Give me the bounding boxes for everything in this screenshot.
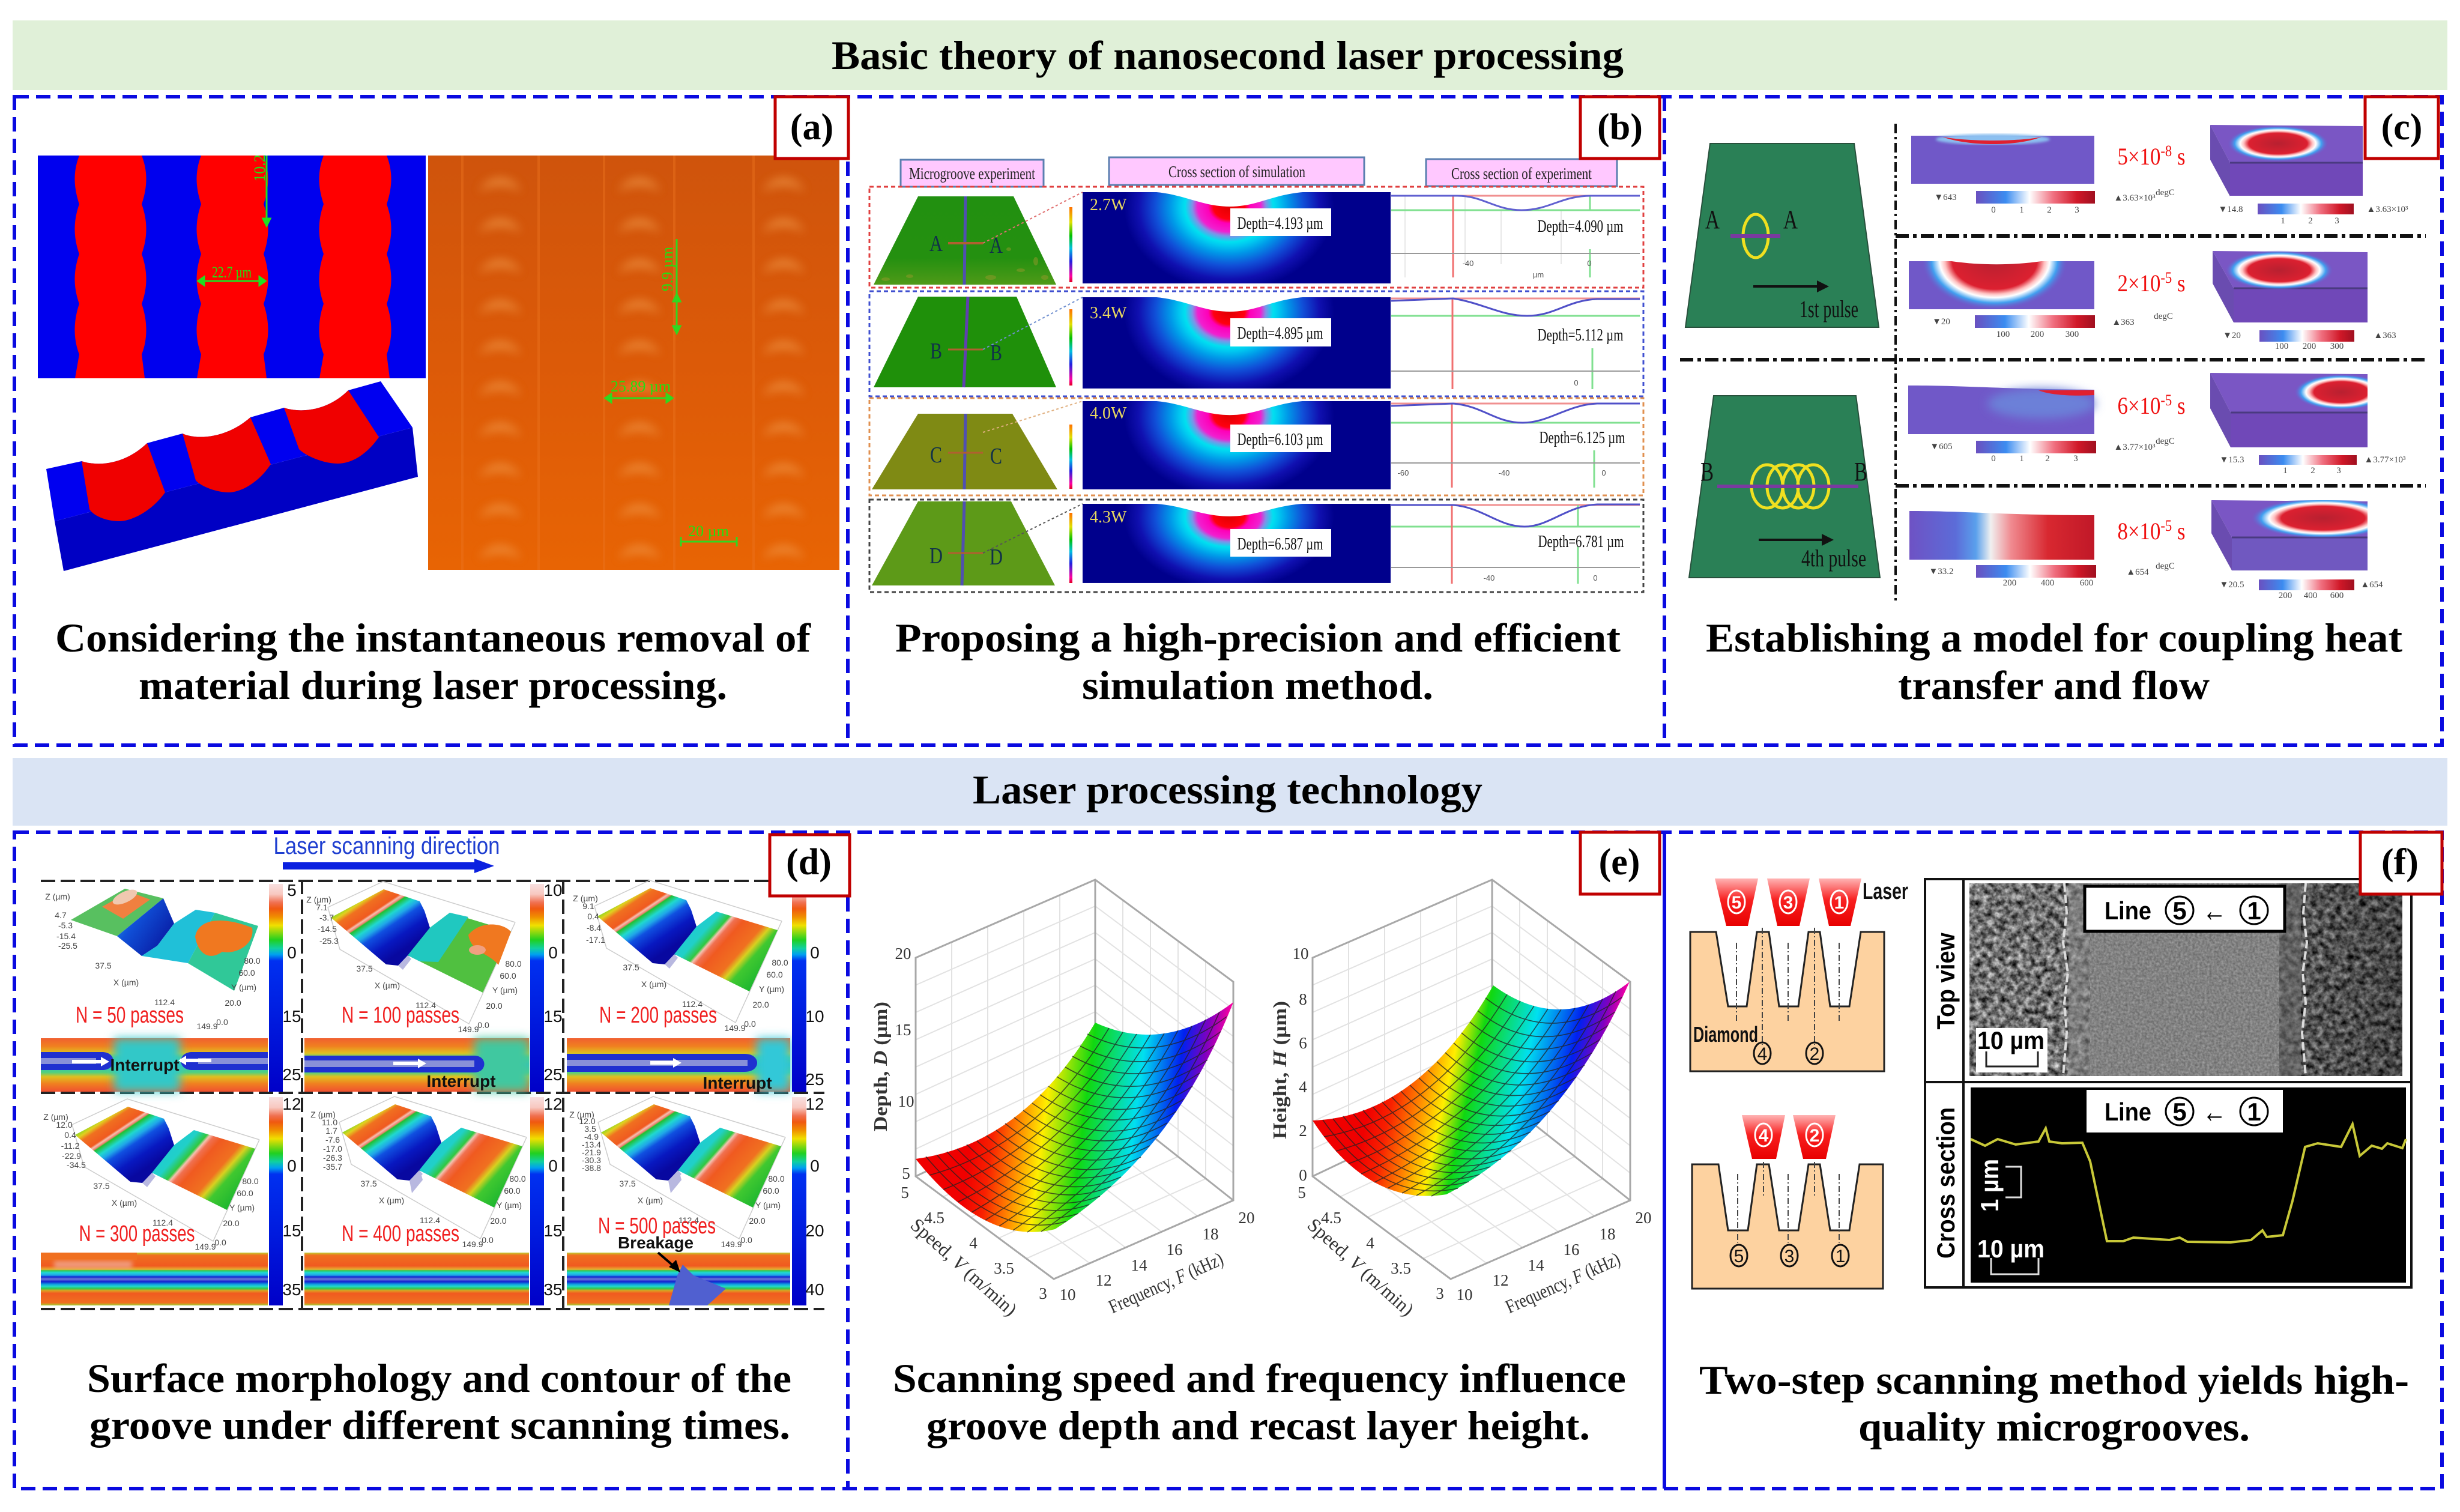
- cross-section profile: Line: [2105, 1098, 2151, 1126]
- surface plot: depth: 3: [1039, 1284, 1047, 1302]
- surface plot: depth: [869, 880, 1255, 1320]
- surface plot: depth: 4.5: [924, 1209, 944, 1227]
- row 4.3W: D: [929, 543, 943, 569]
- cell: N = 300 passes: 0: [287, 1157, 297, 1175]
- surface plot: height: Height, H (µm): [1269, 1001, 1290, 1139]
- 4th pulse schematic: [1689, 396, 1880, 578]
- cell: N = 50 passes: 25: [282, 1065, 301, 1084]
- label (f): [2360, 832, 2442, 894]
- 5e-8 s row: ▼643: [1934, 193, 1957, 202]
- 8e-5 s row: 8×10: [2117, 518, 2167, 545]
- surface plot: depth: 12: [1095, 1271, 1112, 1289]
- 5e-8 s row: 3: [2335, 216, 2339, 226]
- 2e-5 s row: 100: [1996, 330, 2010, 339]
- label (d): [770, 835, 850, 896]
- cell: N = 400 passes: 12: [543, 1095, 563, 1113]
- heading band: basic theory: [13, 20, 2447, 90]
- label (a): [775, 97, 848, 159]
- cell: N = 500 passes: Breakage: [618, 1233, 694, 1252]
- panel (c): heat transfer model: [1680, 97, 2438, 708]
- 6e-5 s row: -5: [2160, 392, 2172, 409]
- cell: N = 300 passes: 0.4: [64, 1130, 76, 1140]
- schematic: second scan step: 3: [1785, 1247, 1794, 1266]
- schematic: first scan step: 5: [1732, 893, 1741, 913]
- 5e-8 s row: 1: [2019, 205, 2024, 215]
- 5e-8 s row: ▲3.63×10³: [2114, 193, 2156, 203]
- 8e-5 s row: 400: [2041, 578, 2054, 588]
- cell: N = 200 passes: N = 200 passes: [599, 1003, 717, 1028]
- schematic: first scan step: [1690, 878, 1908, 1071]
- surface plot: depth: 10: [898, 1092, 914, 1110]
- surface plot: height: 8: [1299, 990, 1307, 1008]
- cell: N = 500 passes: 0: [810, 1157, 820, 1175]
- 2e-5 s row: 200: [2303, 342, 2316, 351]
- label (e): [1580, 832, 1660, 894]
- caption (e): [893, 1355, 1626, 1448]
- surface plot: height: 10: [1292, 945, 1309, 963]
- column headings: Cross section of experiment: [1451, 165, 1592, 183]
- 1st pulse schematic: 1st pulse: [1800, 295, 1858, 322]
- caption (c): transfer and flow: [1898, 662, 2210, 708]
- 8e-5 s row: ▼33.2: [1929, 567, 1954, 576]
- optical micrograph of grooves: 20 µm: [688, 522, 729, 540]
- row 3.4W: Depth=5.112 µm: [1537, 326, 1624, 345]
- cell: N = 400 passes: 15: [543, 1221, 563, 1240]
- result frame: [1925, 879, 2411, 1287]
- row 3.4W: Depth=4.895 µm: [1237, 324, 1323, 343]
- SEM top view: 10 µm: [1977, 1026, 2044, 1054]
- surface plot: depth: 5: [901, 1184, 909, 1202]
- 2e-5 s row: ▲363: [2374, 331, 2396, 340]
- surface plot: height: 16: [1564, 1241, 1579, 1259]
- cell: N = 200 passes: 10: [805, 1007, 824, 1026]
- row 4.0W: -60: [1398, 468, 1409, 477]
- surface plot: height: 6: [1299, 1034, 1307, 1052]
- cell: N = 200 passes: 25: [805, 1070, 824, 1089]
- panel (f): two-step scanning: [1690, 832, 2442, 1450]
- cell: N = 300 passes: 12.0: [56, 1120, 73, 1129]
- 6e-5 s row: 1: [2283, 466, 2288, 476]
- label (c): [2365, 97, 2438, 159]
- surface plot: depth: 14: [1131, 1256, 1147, 1274]
- 2e-5 s row: s: [2172, 270, 2186, 297]
- surface plot: height: Frequency, F (kHz): [1502, 1248, 1623, 1317]
- panel (a): removal model: [38, 97, 848, 708]
- cell: N = 100 passes: N = 100 passes: [342, 1003, 459, 1028]
- laser scanning direction arrow: [274, 833, 500, 873]
- 2e-5 s row: [1909, 250, 2396, 349]
- 6e-5 s row: 2: [2310, 466, 2315, 476]
- 6e-5 s row: 3: [2073, 454, 2078, 464]
- 2e-5 s row: 100: [2275, 342, 2288, 351]
- 2e-5 s row: 300: [2330, 342, 2344, 351]
- caption (d): [87, 1355, 791, 1448]
- row 4.3W: [872, 501, 1640, 585]
- 8e-5 s row: [1909, 498, 2395, 600]
- cell: N = 100 passes: -14.5: [318, 924, 337, 934]
- surface plot: depth: 16: [1166, 1241, 1183, 1259]
- schematic: first scan step: 3: [1783, 893, 1793, 913]
- surface plot: depth: 15: [895, 1021, 911, 1039]
- optical micrograph of grooves: [428, 156, 839, 570]
- cell: N = 200 passes: Interrupt: [703, 1074, 772, 1092]
- surface plot: depth: 3.5: [994, 1259, 1014, 1277]
- surface plot: depth: 4: [969, 1234, 978, 1252]
- cell: N = 400 passes: -26.3: [323, 1153, 342, 1163]
- cell: N = 100 passes: 15: [543, 1007, 563, 1026]
- laser scanning direction arrow: Laser scanning direction: [274, 833, 500, 859]
- cell: N = 500 passes: 12.0: [579, 1116, 596, 1126]
- 2e-5 s row: -5: [2160, 269, 2172, 286]
- schematic: first scan step: Diamond: [1693, 1022, 1758, 1047]
- cross-section profile: ←: [2202, 1095, 2226, 1129]
- cell: N = 100 passes: 25: [543, 1065, 563, 1084]
- schematic: second scan step: 4: [1759, 1126, 1769, 1146]
- surface plot: height: 5: [1298, 1184, 1306, 1202]
- cell: N = 100 passes: Interrupt: [426, 1072, 496, 1090]
- schematic: second scan step: 2: [1810, 1126, 1819, 1146]
- 1st pulse schematic: A: [1783, 205, 1798, 234]
- row 4.3W: -40: [1484, 573, 1494, 582]
- cross-section profile: 1 µm: [1975, 1159, 2004, 1212]
- 2e-5 s row: 2×10: [2117, 270, 2167, 297]
- cell: N = 300 passes: -34.5: [67, 1160, 86, 1170]
- 6e-5 s row: 0: [1991, 454, 1996, 464]
- 8e-5 s row: 200: [2003, 578, 2016, 588]
- cell: N = 200 passes: 0: [810, 943, 820, 962]
- 8e-5 s row: -5: [2160, 517, 2172, 534]
- row 3.4W: 3.4W: [1090, 304, 1127, 322]
- surface plot: height: 12: [1493, 1271, 1508, 1289]
- 6e-5 s row: s: [2172, 392, 2186, 419]
- row 4.0W: Depth=6.125 µm: [1540, 429, 1625, 447]
- cell: N = 400 passes: N = 400 passes: [342, 1221, 459, 1247]
- optical micrograph of grooves: 9.9 µm: [659, 247, 676, 291]
- schematic: first scan step: 4: [1757, 1044, 1767, 1064]
- caption (b): Proposing a high-precision and efficient: [895, 615, 1621, 661]
- 8e-5 s row: ▼20.5: [2219, 580, 2244, 590]
- surface plot: height: 20: [1636, 1209, 1651, 1227]
- 5e-8 s row: 3: [2075, 205, 2079, 215]
- 6e-5 s row: 1: [2019, 454, 2024, 464]
- panel (d): surface morphology: [41, 833, 850, 1448]
- dash-dot separators: [1680, 124, 2426, 602]
- row 2.7W: Depth=4.193 µm: [1237, 214, 1323, 233]
- surface plot: height: 4: [1299, 1078, 1307, 1096]
- surface plot: height: [1269, 880, 1651, 1320]
- 6e-5 s row: 2: [2045, 454, 2050, 464]
- 3D block with red grooves: [46, 381, 418, 571]
- 5e-8 s row: ▼14.8: [2218, 205, 2243, 214]
- row 4.0W: C: [930, 443, 942, 468]
- label (e): (e): [1599, 842, 1640, 883]
- 5e-8 s row: 2: [2047, 205, 2052, 215]
- cell: N = 300 passes: N = 300 passes: [79, 1221, 195, 1247]
- 8e-5 s row: 400: [2304, 591, 2317, 600]
- cell: N = 500 passes: -38.8: [582, 1163, 601, 1173]
- 4th pulse schematic: B: [1854, 457, 1867, 486]
- 5e-8 s row: 0: [1991, 205, 1996, 215]
- label (f): (f): [2381, 842, 2419, 883]
- dashed cell grid: [41, 880, 824, 1309]
- row 4.0W: Depth=6.103 µm: [1237, 431, 1323, 449]
- cross-section profile: 5: [2172, 1098, 2187, 1126]
- cell: N = 500 passes: 40: [805, 1280, 824, 1299]
- 5e-8 s row: ▲3.63×10³: [2366, 205, 2408, 214]
- caption (f): Two-step scanning method yields high-: [1699, 1357, 2409, 1403]
- cell: N = 100 passes: 7.1: [316, 903, 328, 912]
- 6e-5 s row: ▲3.77×10³: [2114, 443, 2156, 452]
- result frame: Cross section: [1932, 1107, 1960, 1259]
- caption (e): groove depth and recast layer height.: [926, 1403, 1590, 1448]
- heading band: laser processing technology: Laser processing technology: [973, 767, 1482, 812]
- schematic: second scan step: 1: [1836, 1247, 1845, 1266]
- cell: N = 300 passes: 15: [282, 1221, 301, 1240]
- row 4.0W: [872, 401, 1640, 489]
- 6e-5 s row: ▼15.3: [2219, 455, 2244, 465]
- row 2.7W: [874, 192, 1640, 285]
- cell: N = 50 passes: 15: [282, 1007, 301, 1026]
- row 2.7W: -40: [1463, 259, 1473, 268]
- cell: N = 50 passes: -5.3: [58, 921, 73, 930]
- cell: N = 200 passes: 9.1: [582, 901, 594, 911]
- cell: N = 500 passes: 20: [805, 1221, 824, 1240]
- cell: N = 50 passes: 0: [287, 943, 297, 962]
- 5e-8 s row: 2: [2308, 216, 2313, 226]
- caption (c): Establishing a model for coupling heat: [1706, 615, 2402, 661]
- caption (d): Surface morphology and contour of the: [87, 1355, 791, 1401]
- surface plot: depth: 20: [1238, 1209, 1255, 1227]
- result frame: Top view: [1932, 933, 1960, 1029]
- cell: N = 400 passes: -7.6: [325, 1135, 340, 1145]
- 2e-5 s row: 300: [2066, 330, 2079, 339]
- SEM top view: Line: [2105, 897, 2151, 925]
- surface plot: height: 14: [1528, 1256, 1544, 1274]
- caption (a): [55, 615, 811, 708]
- cell: N = 500 passes: -30.3: [582, 1155, 601, 1165]
- cell: N = 100 passes: -25.3: [319, 936, 339, 946]
- 5e-8 s row: 5×10: [2117, 143, 2167, 170]
- 6e-5 s row: [1908, 373, 2406, 476]
- row 4.0W: C: [990, 444, 1002, 469]
- schematic: first scan step: 1: [1834, 893, 1844, 913]
- 6e-5 s row: ▼605: [1930, 442, 1953, 452]
- label (d): (d): [786, 842, 832, 883]
- caption (b): simulation method.: [1082, 662, 1433, 708]
- surface plot: depth: 5: [902, 1164, 910, 1182]
- SEM top view: 5: [2172, 897, 2187, 925]
- caption (b): [895, 615, 1621, 708]
- surface plot: height: 4.5: [1321, 1209, 1341, 1227]
- row frames: [869, 187, 1643, 592]
- row 4.0W: -40: [1499, 468, 1510, 477]
- cell: N = 200 passes: -17.1: [586, 935, 605, 945]
- SEM top view: [1969, 883, 2402, 1076]
- surface plot: height: 4: [1366, 1234, 1374, 1252]
- surface plot: depth: 10: [1059, 1286, 1076, 1304]
- column headings: Cross section of simulation: [1168, 163, 1305, 181]
- cell: N = 300 passes: -11.2: [61, 1141, 80, 1151]
- surface plot: depth: Depth, D (µm): [869, 1002, 891, 1131]
- 8e-5 s row: 600: [2330, 591, 2344, 600]
- cell: N = 50 passes: -25.5: [58, 941, 77, 951]
- 2e-5 s row: degC: [2154, 312, 2173, 321]
- label (b): (b): [1597, 107, 1643, 148]
- cell: N = 400 passes: [304, 1095, 563, 1305]
- schematic: first scan step: 2: [1810, 1044, 1819, 1064]
- column headings: Microgroove experiment: [909, 165, 1035, 183]
- 5e-8 s row: [1911, 125, 2408, 226]
- 1st pulse schematic: [1685, 144, 1879, 327]
- cell: N = 50 passes: 5: [287, 881, 297, 900]
- 1st pulse schematic: A: [1705, 205, 1720, 234]
- caption (a): Considering the instantaneous removal of: [55, 615, 811, 661]
- cell: N = 300 passes: 35: [282, 1280, 301, 1299]
- row 4.3W: D: [990, 545, 1003, 570]
- cross-section profile: 1: [2247, 1098, 2261, 1126]
- optical micrograph of grooves: 25.89 µm: [611, 378, 671, 395]
- cell: N = 50 passes: 4.7: [55, 910, 67, 920]
- 8e-5 s row: s: [2172, 518, 2186, 545]
- row 2.7W: 2.7W: [1090, 196, 1127, 214]
- label (c): (c): [2381, 107, 2422, 148]
- 5e-8 s row: s: [2172, 143, 2186, 170]
- cell: N = 500 passes: -13.4: [582, 1140, 601, 1149]
- cell: N = 300 passes: 12: [282, 1095, 301, 1113]
- schematic: second scan step: [1692, 1115, 1883, 1289]
- row 3.4W: B: [990, 340, 1002, 366]
- row 4.3W: Depth=6.587 µm: [1237, 535, 1323, 554]
- SEM top view: ←: [2202, 894, 2226, 928]
- heading band: basic theory: Basic theory of nanosecond laser processing: [832, 32, 1624, 78]
- row 2.7W: 0: [1587, 259, 1592, 268]
- label (b): [1580, 97, 1660, 159]
- surface plot: depth: Frequency, F (kHz): [1105, 1248, 1226, 1317]
- row 3.4W: 0: [1574, 378, 1579, 387]
- 6e-5 s row: ▲3.77×10³: [2364, 455, 2406, 465]
- cell: N = 400 passes: 0: [548, 1157, 558, 1175]
- schematic: first scan step: Laser: [1863, 879, 1908, 904]
- cell: N = 300 passes: [41, 1095, 301, 1305]
- cell: N = 400 passes: -17.0: [323, 1144, 342, 1154]
- 2e-5 s row: ▼20: [2223, 331, 2241, 340]
- caption (f): [1699, 1357, 2409, 1450]
- surface plot: height: 3: [1436, 1284, 1444, 1302]
- cell: N = 200 passes: [567, 880, 824, 1092]
- cell: N = 500 passes: [567, 1095, 824, 1305]
- cell: N = 200 passes: -8.4: [587, 923, 601, 933]
- surface plot: height: 3.5: [1391, 1259, 1411, 1277]
- cell: N = 500 passes: -21.9: [582, 1148, 601, 1157]
- 8e-5 s row: ▲654: [2126, 567, 2149, 577]
- cell: N = 300 passes: -22.9: [62, 1151, 81, 1161]
- caption (a): material during laser processing.: [139, 662, 727, 708]
- cell: N = 50 passes: Interrupt: [110, 1056, 180, 1074]
- cell: N = 100 passes: -3.7: [319, 913, 334, 922]
- 2e-5 s row: ▼20: [1932, 317, 1950, 327]
- 6e-5 s row: 3: [2336, 466, 2341, 476]
- surface plot: height: 18: [1600, 1225, 1615, 1243]
- surface plot: depth: 20: [895, 945, 911, 963]
- surface plot: depth: 18: [1202, 1225, 1219, 1243]
- cell: N = 100 passes: [304, 881, 563, 1092]
- row 4.3W: 0: [1593, 573, 1598, 582]
- 8e-5 s row: ▲654: [2360, 580, 2383, 590]
- simulated top view of scallop grooves: [38, 154, 426, 378]
- 8e-5 s row: 600: [2080, 578, 2093, 588]
- caption (d): groove under different scanning times.: [89, 1402, 790, 1448]
- cell: N = 500 passes: N = 500 passes: [598, 1214, 716, 1239]
- cell: N = 200 passes: 0.4: [587, 912, 599, 921]
- cell: N = 100 passes: 0: [548, 943, 558, 962]
- 2e-5 s row: 200: [2031, 330, 2044, 339]
- row 2.7W: A: [929, 231, 943, 256]
- row 4.0W: 4.0W: [1090, 404, 1127, 423]
- row 2.7W: µm: [1533, 270, 1544, 279]
- caption (e): Scanning speed and frequency influence: [893, 1355, 1626, 1401]
- cross-section profile: 10 µm: [1977, 1235, 2044, 1263]
- caption (c): [1706, 615, 2402, 708]
- 5e-8 s row: degC: [2156, 188, 2175, 198]
- 6e-5 s row: degC: [2156, 437, 2175, 446]
- heading band: laser processing technology: [13, 758, 2447, 826]
- surface plot: depth: Speed, V (m/min): [907, 1214, 1021, 1320]
- row 4.0W: 0: [1601, 468, 1606, 477]
- 4th pulse schematic: 4th pulse: [1801, 545, 1866, 572]
- 5e-8 s row: 1: [2280, 216, 2285, 226]
- cell: N = 400 passes: -35.7: [323, 1162, 342, 1172]
- row 2.7W: A: [990, 233, 1003, 258]
- simulated top view of scallop grooves: 10.2: [251, 154, 268, 182]
- cell: N = 500 passes: -4.9: [584, 1132, 599, 1142]
- column headings: [901, 157, 1617, 187]
- cell: N = 50 passes: [41, 881, 301, 1092]
- surface plot: height: 10: [1457, 1286, 1472, 1304]
- panel (e): response surfaces: [869, 832, 1660, 1448]
- cell: N = 100 passes: 10: [543, 881, 563, 900]
- cross-section profile: [1971, 1087, 2406, 1283]
- row 4.3W: 4.3W: [1090, 508, 1127, 527]
- surface plot: height: 2: [1299, 1122, 1307, 1140]
- row 3.4W: B: [930, 339, 942, 364]
- 8e-5 s row: 200: [2279, 591, 2292, 600]
- cell: N = 400 passes: 11.0: [322, 1117, 337, 1127]
- row 4.3W: Depth=6.781 µm: [1538, 533, 1624, 551]
- caption (f): quality microgrooves.: [1858, 1404, 2250, 1450]
- panel (b): simulation comparison: [869, 97, 1660, 708]
- surface plot: height: Speed, V (m/min): [1304, 1214, 1418, 1320]
- cell: N = 500 passes: 3.5: [584, 1124, 596, 1134]
- schematic: second scan step: 5: [1734, 1247, 1744, 1266]
- 5e-8 s row: -8: [2160, 142, 2172, 160]
- SEM top view: 1: [2247, 897, 2261, 925]
- cell: N = 500 passes: 12: [805, 1095, 824, 1113]
- row 3.4W: [874, 297, 1640, 389]
- simulated top view of scallop grooves: 22.7 µm: [212, 264, 252, 281]
- 4th pulse schematic: B: [1700, 457, 1714, 486]
- cell: N = 50 passes: -15.4: [56, 931, 76, 941]
- 2e-5 s row: ▲363: [2112, 318, 2135, 327]
- surface plot: height: 0: [1299, 1166, 1307, 1184]
- cell: N = 400 passes: 35: [543, 1280, 563, 1299]
- label (a): (a): [790, 107, 833, 148]
- 8e-5 s row: degC: [2156, 561, 2175, 571]
- cell: N = 400 passes: 1.7: [325, 1126, 337, 1136]
- 6e-5 s row: 6×10: [2117, 392, 2167, 419]
- row 2.7W: Depth=4.090 µm: [1537, 217, 1624, 236]
- cell: N = 50 passes: N = 50 passes: [76, 1003, 184, 1028]
